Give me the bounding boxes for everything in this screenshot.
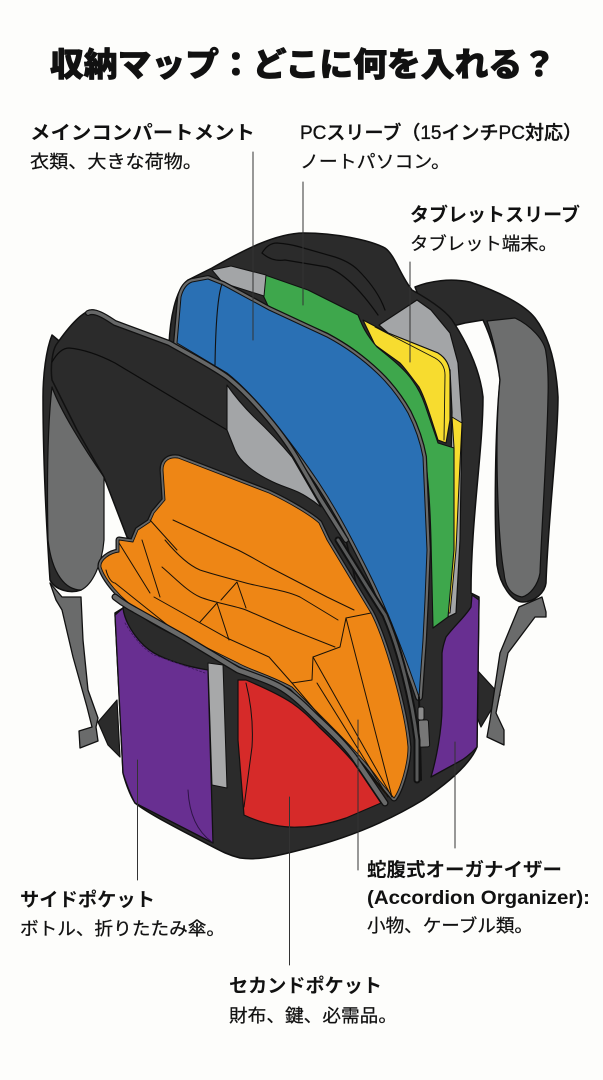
left shoulder strap — [43, 335, 104, 592]
label: tablet sleeve — [410, 203, 580, 254]
label: second pocket — [229, 974, 397, 1026]
top handle — [262, 243, 385, 315]
flap rim — [88, 312, 346, 540]
right gray lining — [379, 300, 462, 617]
label: second pocket: セカンドポケット — [229, 974, 382, 997]
flap seam — [52, 348, 227, 430]
label: second pocket: 財布、鍵、必需品。 — [229, 1006, 397, 1026]
label: PC sleeve — [300, 121, 582, 172]
right lower webbing — [470, 597, 546, 745]
label: accordion organizer: 小物、ケーブル類。 — [367, 915, 533, 936]
label: side pocket: ボトル、折りたたみ傘。 — [20, 919, 225, 939]
left lower webbing — [50, 583, 120, 757]
PC sleeve: green — [263, 275, 454, 628]
label: main compartment: メインコンパートメント — [30, 122, 255, 144]
front flap — [51, 310, 360, 600]
label: tablet sleeve: タブレット端末。 — [410, 233, 557, 254]
gray side strip — [208, 663, 227, 788]
label: tablet sleeve: タブレットスリーブ — [410, 203, 580, 226]
label: main compartment — [30, 122, 255, 172]
lower rim under organizer — [115, 597, 385, 803]
label: side pocket: サイドポケット — [20, 888, 155, 911]
title: 収納マップ：どこに何を入れる？ — [50, 46, 556, 83]
leader lines — [138, 152, 455, 965]
side pocket: left purple — [115, 608, 213, 843]
accordion organizer: orange — [101, 458, 408, 798]
label: PC sleeve: ノートパソコン。 — [300, 152, 450, 172]
flap gray pocket — [227, 385, 321, 507]
bag body — [115, 233, 483, 859]
second pocket: red — [238, 680, 381, 827]
main compartment: blue — [177, 279, 427, 697]
top gray lining — [212, 266, 266, 296]
label: main compartment: 衣類、大きな荷物。 — [30, 152, 202, 172]
label: accordion organizer: (Accordion Organizer): — [367, 888, 590, 909]
tablet sleeve: yellow — [363, 320, 462, 613]
main zipper stripe — [338, 540, 417, 780]
zipper and pull — [418, 697, 430, 780]
right shoulder strap — [415, 280, 558, 602]
side pocket: right purple — [431, 595, 479, 777]
label: accordion organizer: 蛇腹式オーガナイザー — [367, 859, 562, 881]
backpack illustration — [43, 233, 558, 859]
label: PC sleeve: PCスリーブ（15インチPC対応） — [300, 121, 582, 144]
label: accordion organizer — [367, 859, 590, 936]
label: side pocket — [20, 888, 225, 939]
